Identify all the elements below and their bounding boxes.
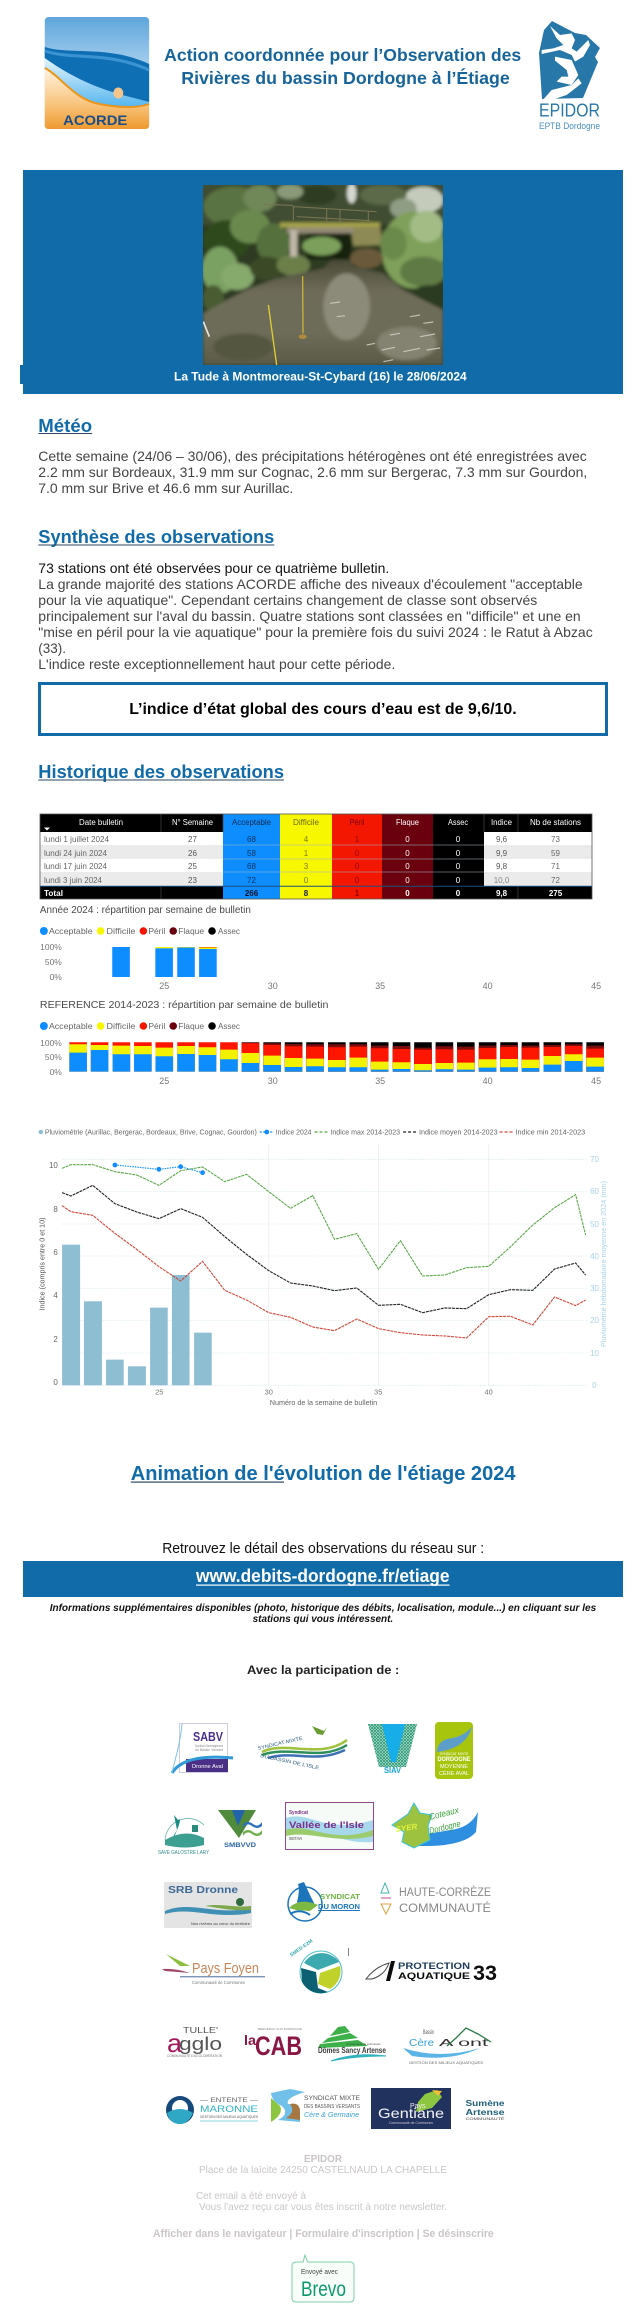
logo: Dordogne moyenne: DORDOGNE	[438, 1757, 470, 1763]
table values: 9,6	[496, 835, 508, 844]
x axis labels: 35	[375, 981, 385, 991]
bar chart: année 2024	[40, 905, 601, 991]
logo: Bassin Cère Amont	[403, 2028, 491, 2065]
logo: Bassin Cère Amont: GESTION DES MILIEUX AQUATIQUES	[409, 2061, 484, 2065]
photo: la Tude à Montmoreau	[203, 185, 443, 365]
legend: Acceptable	[49, 1021, 93, 1031]
table values: 0	[405, 862, 410, 871]
legend: Flaque	[178, 926, 204, 936]
table values: 0	[456, 862, 461, 871]
right axis labels: 10	[590, 1349, 600, 1358]
photo caption: La Tude à Montmoreau-St-Cybard (16) le 28/06/2024	[174, 370, 467, 384]
logo: Pays Foyen: Communauté de Communes	[192, 1980, 246, 1985]
legend: Difficile	[107, 926, 136, 936]
x axis labels	[159, 1076, 601, 1086]
text: synthèse: 73 stations ont été observées pour ce quatrième bulletin.	[38, 560, 389, 576]
left axis labels: 2	[53, 1335, 58, 1344]
logo: la CAB: CAB	[255, 2031, 302, 2061]
logo: Tulle agglo: COMMUNAUTÉ D'AGGLOMÉRATION	[167, 2053, 223, 2058]
table values: 27	[188, 835, 197, 844]
logo: EPIDOR: EPIDOR	[539, 101, 600, 121]
logo: ACORDE	[45, 17, 149, 129]
logo: syndicat vallée de l'Isle: Vallée de l'Isle	[289, 1820, 364, 1830]
table values: 9,8	[496, 862, 508, 871]
rainfall bars	[62, 1245, 212, 1385]
logo: Pays Gentiane	[371, 2088, 451, 2129]
table dates: lundi 1 juillet 2024	[44, 835, 110, 844]
logo: Pays Foyen	[162, 1954, 265, 1985]
text: retrouvez: Retrouvez le détail des observations du réseau sur :	[162, 1541, 484, 1557]
title: Action coordonnée pour l’Observation des	[164, 45, 521, 65]
footer: address: Vous l'avez reçu car vous êtes inscrit à notre newsletter.	[199, 2201, 447, 2213]
logo: Protection aquatique 33: AQUATIQUE	[398, 1971, 470, 1982]
y axis labels	[40, 1038, 62, 1077]
legend	[39, 1127, 585, 1137]
text: synthèse: "mise en péril pour la vie aquatique" pour la première fois du suivi 2024 : le Ratut à Abzac	[38, 624, 593, 640]
table header row: Péril	[350, 818, 365, 827]
x axis labels: 30	[268, 1076, 278, 1086]
partner logos	[158, 1722, 505, 2129]
heading: avec la participation de: Avec la participation de :	[247, 1663, 399, 1677]
table header row: Difficile	[293, 818, 320, 827]
table values: 1	[304, 849, 309, 858]
legend: Assec	[218, 926, 241, 936]
legend	[40, 1021, 241, 1031]
y axis labels	[40, 942, 62, 982]
title	[164, 45, 521, 88]
x axis labels: 25	[159, 1076, 169, 1086]
text: météo: 7.0 mm sur Brive et 46.6 mm sur Aurillac.	[38, 480, 293, 496]
logo: SABV	[172, 1724, 233, 1773]
table values: 0	[355, 849, 360, 858]
table values: 0	[405, 876, 410, 885]
logo: SABV: Syndicat d'Aménagement	[195, 1744, 223, 1748]
x axis labels	[155, 1387, 493, 1397]
table dates: lundi 3 juin 2024	[44, 876, 103, 885]
logo: syndicat mixte du bassin de l'Isle: SYNDICAT MIXTE	[257, 1736, 304, 1752]
footer: address: Cet email a été envoyé à	[196, 2190, 306, 2202]
table header row: Indice	[491, 818, 513, 827]
right axis labels	[590, 1155, 600, 1390]
logo: Haute-Corrèze communauté: HAUTE-CORRÈZE	[399, 1886, 491, 1899]
table values: 4	[304, 835, 309, 844]
logo: Protection aquatique 33: PROTECTION	[398, 1961, 470, 1972]
text: synthèse: L'indice reste exceptionnellement haut pour cette période.	[38, 656, 395, 672]
table values: 0	[405, 889, 410, 898]
right axis labels: 50	[590, 1220, 600, 1229]
table values: 0	[405, 849, 410, 858]
logo: Pays Gentiane: Pays	[410, 2103, 426, 2110]
logo: ACORDE: ACORDE	[63, 112, 127, 128]
x axis labels: 40	[483, 1076, 493, 1086]
left axis labels: 10	[49, 1161, 58, 1170]
legend: Indice max 2014-2023	[330, 1127, 400, 1137]
x axis labels: 45	[591, 981, 601, 991]
legend: Flaque	[178, 1021, 204, 1031]
table values: 9,9	[496, 849, 508, 858]
y axis labels: 100%	[40, 1038, 62, 1048]
link bar: debits-dordogne	[23, 1561, 623, 1597]
table values: 72	[247, 876, 256, 885]
x axis labels	[159, 981, 601, 991]
table header row: Nb de stations	[530, 818, 581, 827]
table values: 0	[456, 876, 461, 885]
logo: SABV: SABV	[193, 1729, 223, 1744]
note: informations supplémentaires: Informations supplémentaires disponibles (photo, historique des débits, localisation, module...) en cliquant sur les	[50, 1602, 596, 1614]
right axis labels: 70	[590, 1155, 600, 1164]
heading: Météo: Météo	[38, 416, 92, 436]
legend: Péril	[148, 1021, 165, 1031]
logo: SMBV Cère et Germaine	[271, 2089, 361, 2122]
table values: 26	[188, 849, 197, 858]
table values: 8	[304, 889, 309, 898]
legend: Indice 2024	[276, 1127, 312, 1137]
x axis labels: 35	[374, 1387, 382, 1397]
logo: SMBV Cère et Germaine: Cère & Germaine	[304, 2112, 359, 2119]
legend: Acceptable	[49, 926, 93, 936]
callout: indice global	[40, 684, 606, 734]
logo: SIAV: SIAV	[384, 1766, 402, 1775]
table values: 0	[355, 876, 360, 885]
chart title: Année 2024 : répartition par semaine de bulletin	[40, 905, 251, 916]
logo: Entente Maronne: GESTION DES MILIEUX AQUATIQUES	[200, 2115, 258, 2119]
table values: 0	[355, 862, 360, 871]
legend	[40, 926, 241, 936]
table dates: Total	[44, 889, 63, 898]
heading: Historique des observations: Historique des observations	[38, 762, 284, 782]
logo: Pays Gentiane: Communauté de Communes	[389, 2121, 433, 2125]
table values: 1	[355, 889, 360, 898]
left axis labels: 4	[53, 1291, 58, 1300]
header: logos and title	[45, 17, 600, 131]
logo: EPIDOR: EPTB Dordogne	[539, 121, 600, 131]
y axis labels: 0%	[50, 972, 62, 982]
logo: syndicat du Moron: SYNDICAT	[320, 1894, 361, 1901]
badge: envoyé avec Brevo: Envoyé avec	[301, 2267, 338, 2276]
logo: syndicat mixte du bassin de l'Isle: DU BASSIN DE L'ISLE	[260, 1753, 320, 1772]
table values: 10,0	[494, 876, 510, 885]
logo: Dordogne moyenne	[435, 1722, 473, 1779]
logo: la CAB: BERGERAC SUD DORDOGNE	[258, 2027, 302, 2031]
left axis labels: 8	[53, 1205, 58, 1214]
logo: Dordogne moyenne: CÈRE AVAL	[439, 1770, 469, 1777]
logo: Tulle agglo	[167, 2025, 223, 2058]
x axis labels: 30	[265, 1387, 273, 1397]
table values: 25	[188, 862, 197, 871]
legend: Péril	[148, 926, 165, 936]
text: synthèse	[38, 560, 593, 672]
table header row: Flaque	[396, 818, 420, 827]
logo: SABV: du Bassin Versant	[195, 1748, 223, 1752]
table values: 72	[551, 876, 560, 885]
logo: Entente Maronne: — ENTENTE —	[200, 2098, 258, 2104]
legend: Indice min 2014-2023	[516, 1127, 585, 1137]
logo: Coteaux de Dordogne: SYER	[395, 1822, 418, 1834]
badge: envoyé avec Brevo: Brevo	[301, 2278, 346, 2301]
line: indice min	[62, 1206, 586, 1338]
table header row	[79, 818, 581, 827]
logo: Protection aquatique 33	[366, 1961, 497, 1985]
table values: 68	[247, 862, 256, 871]
logo: Coteaux de Dordogne	[392, 1803, 478, 1848]
left axis labels: 6	[53, 1248, 58, 1257]
y axis labels: 100%	[40, 942, 62, 952]
table background columns	[40, 814, 592, 899]
logo: Tulle agglo: gglo	[179, 2034, 222, 2054]
logo: Haute-Corrèze communauté	[381, 1883, 491, 1915]
table values: 0	[456, 849, 461, 858]
table header row: Acceptable	[232, 818, 272, 827]
heading: Synthèse: Synthèse des observations	[38, 527, 274, 547]
heading: animation: Animation de l'évolution de l'étiage 2024	[131, 1463, 516, 1485]
logo: Dômes Sancy Artense: Dômes Sancy Artense	[318, 2046, 386, 2055]
logo: Bassin Cère Amont: Bassin	[423, 2029, 434, 2036]
table values: 73	[551, 835, 560, 844]
legend: Difficile	[107, 1021, 136, 1031]
table values: 0	[405, 835, 410, 844]
logo: Protection aquatique 33: 33	[473, 1962, 497, 1985]
bar chart: référence 2014-2023	[40, 1000, 604, 1086]
logo: SRB Dronne	[164, 1882, 252, 1928]
x axis labels: 25	[155, 1387, 163, 1397]
table values: 59	[551, 849, 560, 858]
logo: Dordogne moyenne: SYNDICAT MIXTE	[439, 1752, 469, 1756]
logo: SMBVVD	[218, 1810, 262, 1849]
footer: address: EPIDOR	[304, 2153, 342, 2165]
line: indice 2024	[115, 1165, 203, 1173]
logo: Dômes Sancy Artense: communauté de communes	[346, 2042, 381, 2046]
callout: indice global: L’indice d’état global des cours d’eau est de 9,6/10.	[129, 701, 517, 718]
plot area	[62, 1143, 586, 1385]
x axis labels: 25	[159, 981, 169, 991]
table values: 23	[188, 876, 197, 885]
legend: Indice moyen 2014-2023	[419, 1127, 498, 1137]
logo: Save Galostre Lary	[158, 1815, 210, 1856]
logo: Coteaux de Dordogne: Dordogne	[428, 1818, 462, 1836]
logo: la CAB	[244, 2027, 302, 2061]
table values: 58	[247, 849, 256, 858]
logo: SABV: Dronne Aval	[192, 1764, 223, 1770]
logo: Haute-Corrèze communauté: COMMUNAUTÉ	[399, 1902, 491, 1915]
logo: SMBV Cère et Germaine: SYNDICAT MIXTE	[304, 2096, 360, 2102]
logo: SMED: SMED-E2M	[289, 1938, 314, 1958]
section: Météo	[38, 416, 587, 496]
right axis labels: 30	[590, 1284, 600, 1293]
table values: 68	[247, 835, 256, 844]
combo chart: indice et pluviométrie	[39, 1127, 608, 1407]
table values: 1	[355, 835, 360, 844]
y axis labels: 50%	[45, 1052, 62, 1062]
chart title: REFERENCE 2014-2023 : répartition par semaine de bulletin	[40, 1000, 329, 1011]
line: indice max	[62, 1165, 586, 1276]
x axis labels: 35	[375, 1076, 385, 1086]
logo: EPIDOR	[539, 21, 600, 131]
logo: Pays Foyen: Pays Foyen	[192, 1960, 259, 1977]
stacked bars	[69, 1042, 604, 1072]
text: synthèse: pour la vie aquatique". Cependant certains changement de classe sont observés	[38, 592, 537, 608]
table values: 3	[304, 862, 309, 871]
right axis labels: 60	[590, 1187, 600, 1196]
legend: Assec	[218, 1021, 241, 1031]
note: informations supplémentaires: stations qui vous intéressent.	[253, 1613, 393, 1625]
logo: SIAV	[368, 1724, 417, 1775]
table values: 0	[456, 889, 461, 898]
logo: syndicat du Moron	[288, 1882, 361, 1921]
footer: address	[153, 2153, 494, 2240]
table values	[188, 835, 563, 898]
table values: 71	[551, 862, 560, 871]
left axis labels: 0	[53, 1378, 58, 1387]
logo: syndicat vallée de l'Isle: Syndicat	[289, 1810, 308, 1816]
text: synthèse: (33).	[38, 640, 66, 656]
logo: Sumène Artense: Artense	[466, 2108, 505, 2117]
logo: syndicat du Moron: DU MORON	[318, 1904, 360, 1911]
right axis labels: 40	[590, 1252, 600, 1261]
logo: la CAB: la	[244, 2032, 256, 2048]
table header row: N° Semaine	[172, 818, 214, 827]
logo: syndicat vallée de l'Isle	[286, 1802, 374, 1850]
x axis labels: 45	[591, 1076, 601, 1086]
logo: Coteaux de Dordogne: Coteaux	[428, 1805, 460, 1822]
table values: 266	[245, 889, 259, 898]
logo: Tulle agglo: TULLE'	[183, 2025, 218, 2035]
x axis title: Numéro de la semaine de bulletin	[270, 1398, 377, 1407]
title: Rivières du bassin Dordogne à l’Étiage	[181, 67, 510, 88]
banner: photo and caption	[20, 170, 623, 394]
x axis labels: 40	[483, 981, 493, 991]
table header row: Date bulletin	[79, 818, 123, 827]
table dates: lundi 17 juin 2024	[44, 862, 108, 871]
right axis labels: 0	[592, 1381, 597, 1390]
logo: Pays Gentiane: Gentiane	[378, 2105, 444, 2121]
text: météo: Cette semaine (24/06 – 30/06), des précipitations hétérogènes ont été enregistrées avec	[38, 448, 587, 464]
left axis labels	[49, 1161, 58, 1387]
legend: Pluviométrie (Aurillac, Bergerac, Bordeaux, Brive, Cognac, Gourdon)	[45, 1127, 257, 1137]
x axis labels: 40	[484, 1387, 493, 1397]
logo: SMBVVD: SMBVVD	[224, 1842, 256, 1849]
right axis labels: 20	[590, 1316, 600, 1325]
text: météo	[38, 448, 587, 496]
badge: envoyé avec Brevo	[292, 2255, 354, 2302]
table values: 275	[549, 889, 563, 898]
stacked bars	[112, 947, 217, 977]
link bar: debits-dordogne: www.debits-dordogne.fr/etiage	[195, 1566, 450, 1586]
logo: Sumène Artense: Sumène	[466, 2099, 505, 2108]
note: informations supplémentaires	[50, 1602, 596, 1625]
y axis labels: 0%	[50, 1067, 62, 1077]
table dates: lundi 24 juin 2024	[44, 849, 108, 858]
footer: address: Afficher dans le navigateur | Formulaire d'inscription | Se désinscrire	[153, 2228, 494, 2240]
logo: Sumène Artense: COMMUNAUTÉ	[466, 2116, 504, 2121]
x axis labels: 30	[268, 981, 278, 991]
logo: Entente Maronne	[166, 2096, 258, 2124]
text: météo: 2.2 mm sur Bordeaux, 31.9 mm sur Cognac, 2.6 mm sur Bergerac, 7.3 mm sur Gourdon,	[38, 464, 587, 480]
logo: Dômes Sancy Artense	[318, 2026, 386, 2061]
logo: SMED	[289, 1938, 349, 1993]
section: Synthèse des observations	[38, 527, 607, 734]
table dates	[44, 835, 110, 898]
table: historique des bulletins	[40, 814, 592, 899]
y axis labels: 50%	[45, 957, 62, 967]
logo: Entente Maronne: MARONNE	[200, 2104, 258, 2114]
indice 2024 markers	[113, 1163, 205, 1175]
logo: Bassin Cère Amont: Cère	[409, 2038, 434, 2049]
logo: syndicat vallée de l'Isle: SIETAVI	[289, 1836, 302, 1841]
logo: Bassin Cère Amont: A ont	[439, 2038, 488, 2049]
table values: 0	[304, 876, 309, 885]
logo: SMBV Cère et Germaine: DES BASSINS VERSANTS	[304, 2104, 361, 2110]
logo: Save Galostre Lary: SAVE GALOSTRE LARY	[158, 1850, 210, 1856]
table values: 9,8	[496, 889, 508, 898]
logo: SRB Dronne: SRB Dronne	[168, 1885, 239, 1896]
logo: Dordogne moyenne: MOYENNE	[440, 1764, 468, 1770]
line: indice moyen	[62, 1185, 586, 1313]
logo: Sumène Artense	[466, 2099, 505, 2121]
left axis title: Indice (compris entre 0 et 10)	[39, 1218, 46, 1310]
logo: SRB Dronne: Nos rivières au cœur du territoire	[191, 1922, 250, 1926]
text: synthèse: La grande majorité des stations ACORDE affiche des niveaux d'écoulement "acceptable	[38, 576, 583, 592]
logo: syndicat mixte du bassin de l'Isle	[257, 1726, 347, 1772]
right axis title: Pluviométrie hebdomadaire moyenne en 2024 (mm)	[601, 1181, 608, 1347]
table header row: Assec	[448, 818, 468, 827]
logo: Tulle agglo: a	[167, 2028, 183, 2058]
table values: 0	[456, 835, 461, 844]
footer: address: Place de la laïcite 24250 CASTELNAUD LA CHAPELLE	[199, 2164, 447, 2176]
text: synthèse: principalement sur l'aval du bassin. Quatre stations sont classées en "difficile" et une en	[38, 608, 581, 624]
